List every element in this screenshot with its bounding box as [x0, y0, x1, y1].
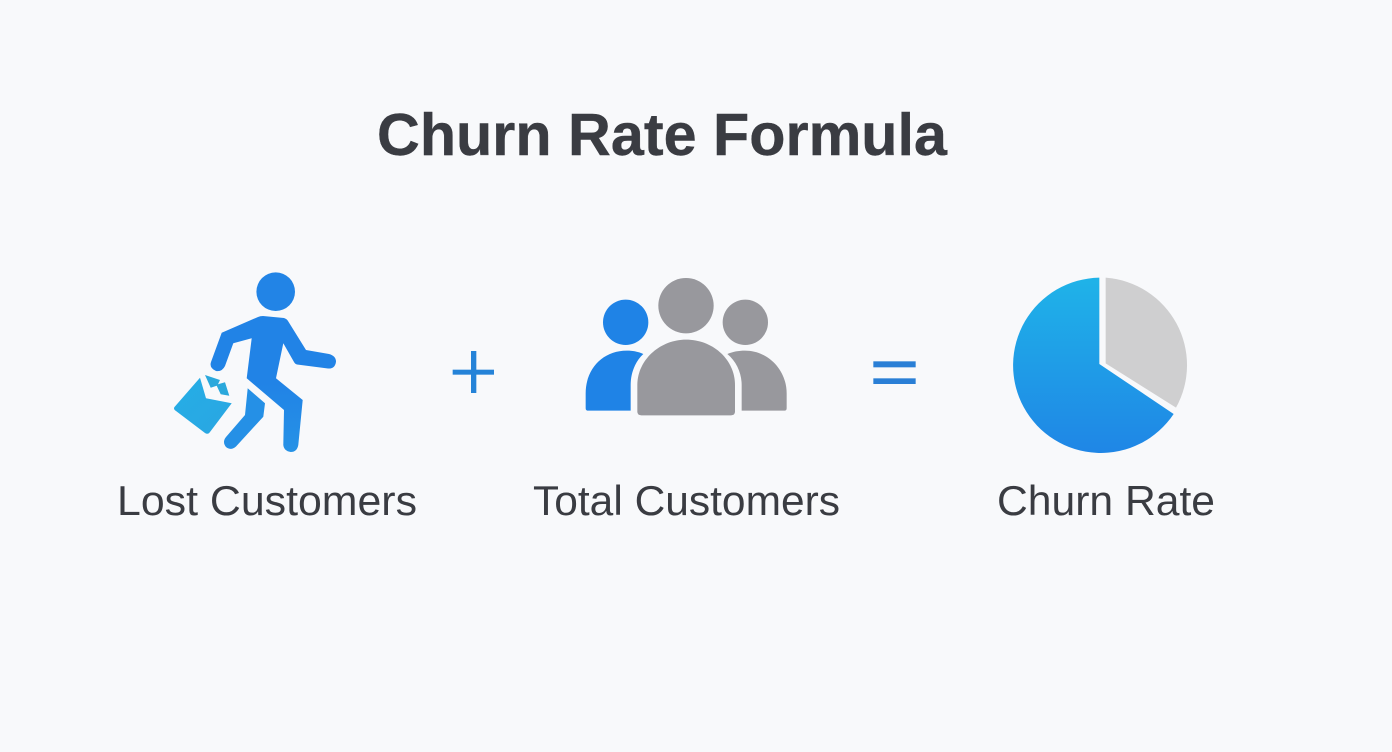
head — [256, 272, 295, 311]
back leg — [224, 388, 265, 449]
title: Churn Rate Formula — [377, 102, 948, 168]
pie chart: churn rate — [1013, 278, 1187, 453]
briefcase — [174, 378, 232, 434]
body and limbs — [211, 316, 336, 452]
label: churn rate: Churn Rate — [997, 477, 1215, 524]
label: total customers: Total Customers — [533, 477, 840, 524]
blue person — [586, 300, 648, 411]
grey person centre — [637, 278, 735, 415]
label: lost customers: Lost Customers — [117, 477, 417, 524]
briefcase fragment — [205, 375, 229, 396]
retained slice — [1013, 278, 1174, 453]
churned slice — [1106, 278, 1187, 408]
icon: lost customer walking away with broken bag — [174, 272, 336, 452]
grey person right — [723, 300, 787, 411]
equals sign — [873, 361, 916, 384]
icon: group of total customers — [586, 278, 787, 415]
plus sign — [453, 351, 494, 393]
